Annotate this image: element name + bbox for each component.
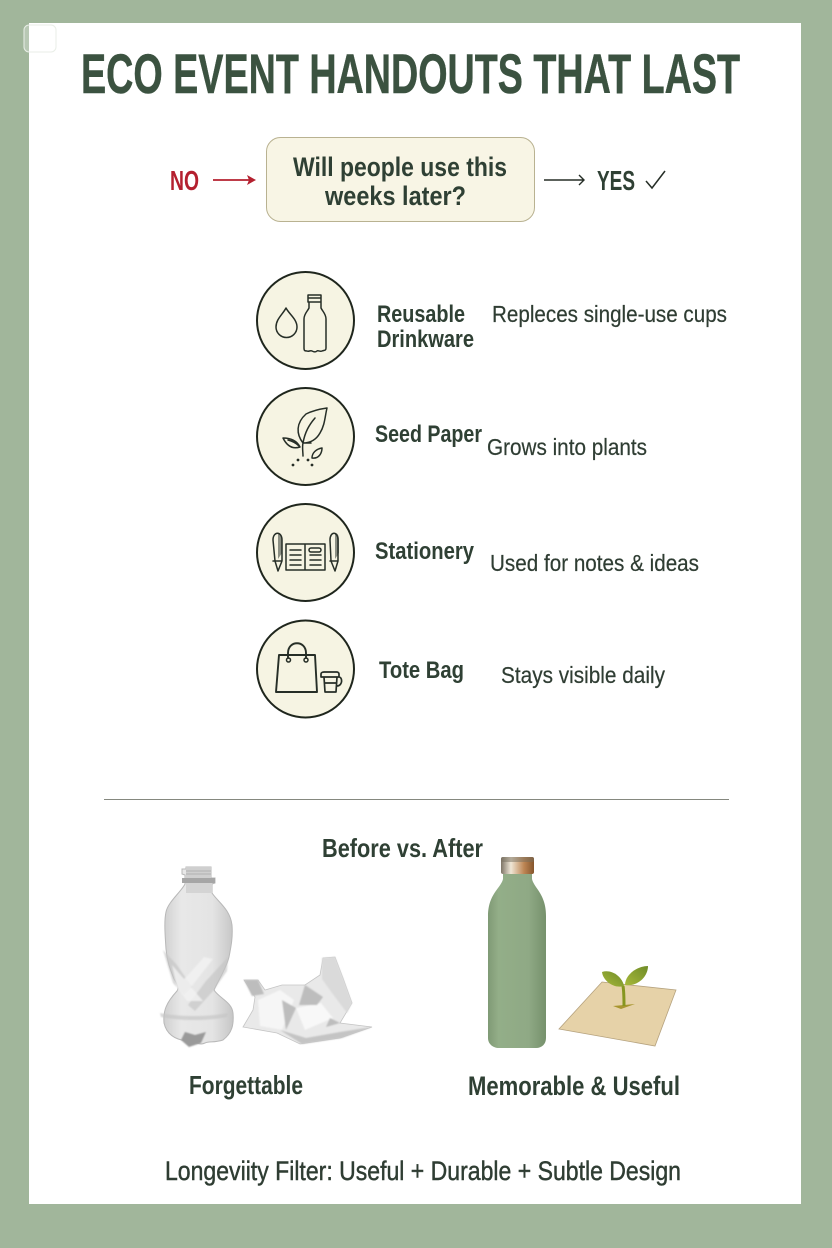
row: tote bag: Stays visible daily [501, 662, 665, 688]
icon: notebook and pens [257, 504, 354, 601]
arrow: yes [544, 175, 584, 185]
yes label: YES [597, 165, 635, 196]
label: memorable and useful: Memorable & Useful [468, 1071, 680, 1101]
question box: Will people use this [293, 152, 507, 182]
row: seed paper: Grows into plants [487, 434, 647, 460]
after: seed paper and sprout [559, 966, 676, 1046]
no label: NO [170, 165, 199, 196]
row: stationery: Used for notes & ideas [490, 550, 699, 576]
label: forgettable: Forgettable [189, 1070, 303, 1100]
before: crumpled paper [243, 957, 372, 1044]
decision flow [170, 138, 665, 222]
icon: check [646, 171, 665, 188]
arrow head: no [247, 175, 256, 185]
row: stationery [257, 504, 699, 601]
arrow: no [213, 179, 250, 181]
row: reusable drinkware [257, 272, 727, 369]
heading: before vs after: Before vs. After [322, 833, 483, 863]
watermark badge [24, 25, 56, 52]
icon: bag and cup [257, 620, 354, 718]
row: tote bag [257, 620, 665, 718]
after: green bottle [488, 857, 546, 1048]
row: seed paper [257, 388, 647, 485]
icon: drop and bottle [257, 272, 354, 369]
icon: sprout [257, 388, 354, 485]
before: crushed bottle [160, 867, 233, 1047]
question box [266, 138, 534, 222]
divider [104, 799, 729, 800]
footer: longevity filter: Longeviity Filter: Useful + Durable + Subtle Design [165, 1156, 681, 1186]
row: reusable drinkware: Repleces single-use cups [492, 301, 727, 327]
row: tote bag: Tote Bag [379, 657, 464, 684]
question box: weeks later? [324, 181, 466, 211]
row: seed paper: Seed Paper [375, 421, 482, 448]
row: stationery: Stationery [375, 538, 475, 565]
row: reusable drinkware: Reusable [377, 301, 465, 328]
row: reusable drinkware: Drinkware [377, 326, 474, 353]
